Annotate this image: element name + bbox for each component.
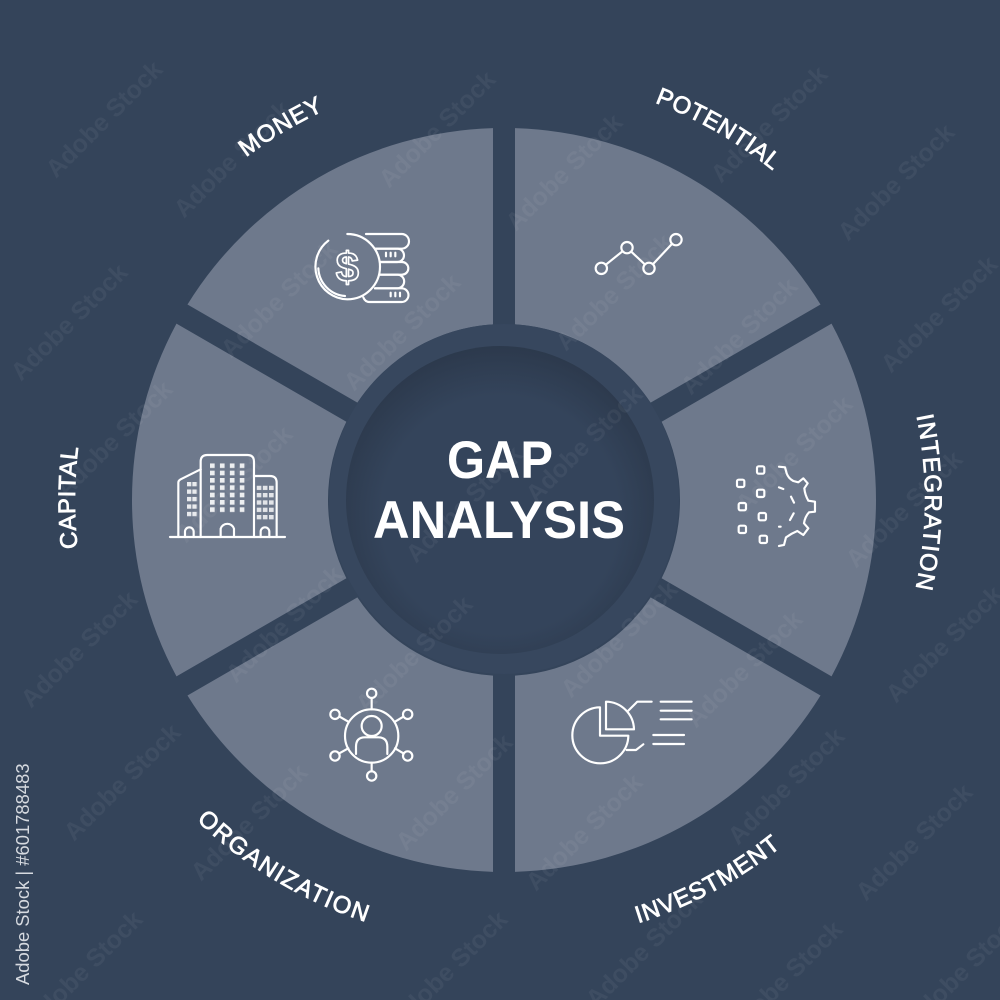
watermark text: Adobe Stock [338, 268, 466, 396]
panel: investment segment [430, 558, 821, 960]
panel: potential segment [515, 128, 821, 403]
label: integration: INTEGRATION [916, 414, 942, 590]
stock credit: Adobe Stock | #601788483 [12, 763, 33, 985]
icon: organization network [330, 689, 412, 781]
panel: organization segment [187, 597, 493, 872]
watermark text: Adobe Stock [680, 605, 808, 733]
icon: money coin stack: $ [336, 244, 359, 291]
watermark text: Adobe Stock [520, 380, 648, 508]
icon: money coin stack [315, 234, 409, 302]
watermark text: Adobe Stock [875, 250, 1000, 378]
icon: integration gear and dots [737, 466, 815, 546]
label: capital: CAPITAL [58, 448, 78, 548]
watermark text: Adobe Stock [390, 728, 518, 856]
watermark text: Adobe Stock [730, 390, 858, 518]
watermark text: Adobe Stock [15, 585, 143, 713]
icon: potential line graph [596, 234, 682, 274]
watermark text: Adobe Stock [400, 440, 528, 568]
panel: money segment [187, 40, 578, 442]
center hub ring [329, 324, 679, 674]
watermark text: Adobe Stock [373, 65, 501, 193]
panel: capital segment [24, 275, 414, 676]
watermark text: Adobe Stock [550, 228, 678, 356]
title: ANALYSIS [373, 491, 625, 550]
watermark text: Adobe Stock [555, 575, 683, 703]
title: GAP [447, 431, 553, 490]
watermark text: Adobe Stock [170, 420, 298, 548]
watermark text: Adobe Stock [840, 445, 968, 573]
title [373, 431, 625, 550]
icon: capital buildings [170, 455, 285, 537]
label: investment: INVESTMENT [634, 834, 777, 923]
watermark text: Adobe Stock [850, 778, 978, 906]
watermark text: Adobe Stock [58, 718, 186, 846]
watermark text: Adobe Stock [675, 272, 803, 400]
watermark text: Adobe Stock [722, 722, 850, 850]
watermark text: Adobe Stock [832, 118, 960, 246]
watermark text: Adobe Stock [520, 768, 648, 896]
watermark text: Adobe Stock [215, 235, 343, 363]
panel: integration segment [594, 324, 984, 725]
watermark text: Adobe Stock [350, 590, 478, 718]
watermark text: Adobe Stock [500, 108, 628, 236]
watermark text: Adobe Stock [705, 60, 833, 188]
icon: investment pie chart [572, 702, 692, 763]
watermark text: Adobe Stock [5, 258, 133, 386]
watermark text: Adobe Stock [50, 375, 178, 503]
label: organization: ORGANIZATION [200, 811, 370, 922]
watermark text: Adobe Stock [185, 758, 313, 886]
center hub disc [346, 346, 654, 654]
watermark text: Adobe Stock [40, 55, 168, 183]
label: money: MONEY [237, 95, 318, 157]
label: potential: POTENTIAL [656, 87, 776, 171]
watermark text: Adobe Stock [168, 95, 296, 223]
watermark text: Adobe Stock [220, 560, 348, 688]
